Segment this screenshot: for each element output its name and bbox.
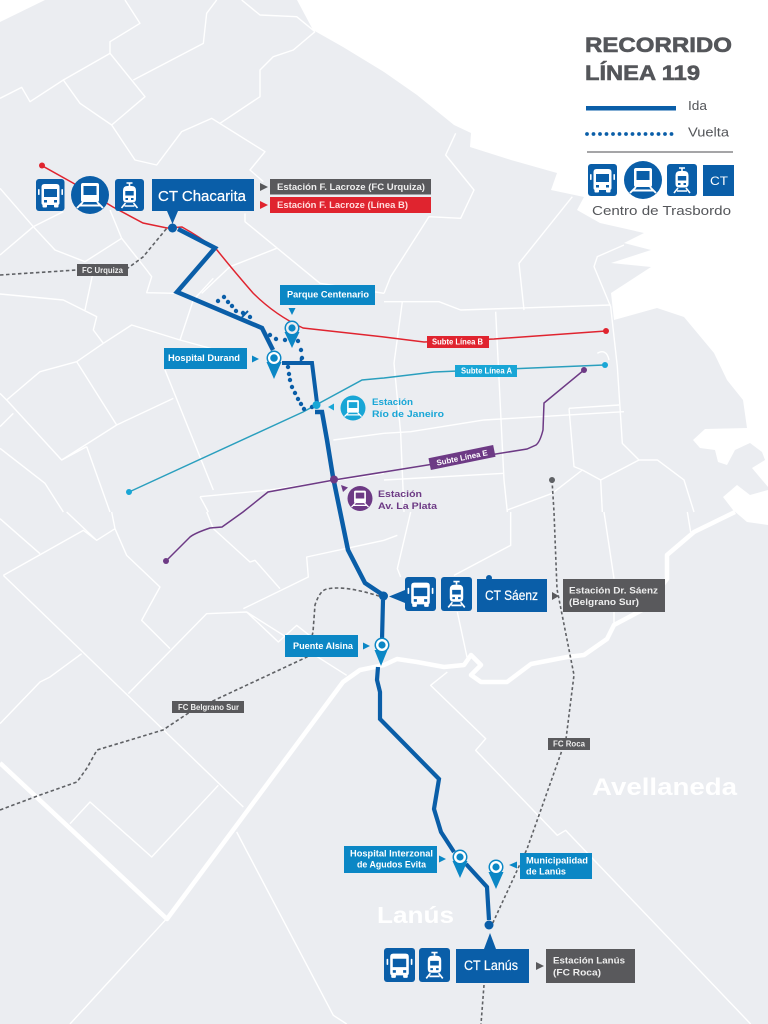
transfer centre: Chacarita [36, 176, 431, 224]
tag: Estación Dr. Sáenz (Belgrano Sur): Estación Dr. Sáenz [569, 586, 659, 596]
box: CT Lanús [456, 933, 529, 983]
callout: Municipalidad de Lanús: Municipalidad [526, 856, 588, 866]
label: FC Roca: FC Roca [553, 740, 586, 748]
text: Lanús: Lanús [377, 902, 454, 928]
riachuelo and thick avenue [0, 512, 735, 919]
legend icon: CT: CT [710, 174, 729, 188]
box: CT Chacarita: CT Chacarita [158, 189, 247, 205]
station: Río de Janeiro: Estación [372, 397, 413, 408]
subway line E [163, 367, 587, 564]
subway line A [126, 362, 608, 495]
title: RECORRIDO [585, 34, 732, 57]
station: Río de Janeiro [328, 396, 444, 420]
tag: Estación Lanús (FC Roca): Estación Lanús [553, 956, 625, 966]
node: Río de Janeiro [312, 401, 320, 409]
legend: ida [586, 99, 707, 113]
callout: Hospital Interzonal de Agudos Evita [344, 846, 446, 873]
streets north-west [0, 0, 384, 512]
legend icon: bus [588, 164, 617, 196]
legend: ida: Ida [688, 99, 707, 113]
callout: Municipalidad de Lanús [509, 853, 592, 879]
icon: train [115, 179, 144, 211]
label: Subte Línea E [428, 445, 496, 470]
tag: Estación F. Lacroze (Línea B) [260, 197, 431, 213]
box: CT Chacarita [152, 179, 254, 224]
transfer centre: Sáenz [389, 575, 665, 612]
tag: Estación F. Lacroze (Línea B): Estación F. Lacroze (Línea B) [277, 200, 408, 210]
label: FC Belgrano Sur: FC Belgrano Sur [178, 703, 239, 712]
route: ida solid [177, 229, 489, 920]
tag: Estación Dr. Sáenz (Belgrano Sur) [552, 579, 665, 612]
box: CT Lanús: CT Lanús [464, 958, 518, 973]
label: Subte Línea B: Subte Línea B [432, 338, 483, 346]
streets north-east [384, 133, 694, 512]
icon: bus [389, 577, 436, 611]
callout: Hospital Durand [164, 348, 259, 369]
callout: Municipalidad de Lanús: de Lanús [526, 866, 566, 876]
station: Av. La Plata: Estación [378, 489, 422, 500]
river mouth [723, 485, 768, 525]
tag: Estación Lanús (FC Roca): (FC Roca) [553, 968, 601, 978]
node: Av. La Plata [330, 476, 338, 484]
legend: vuelta: Vuelta [688, 126, 729, 140]
callout: Hospital Durand: Hospital Durand [168, 353, 240, 364]
box: CT Sáenz [477, 579, 547, 612]
rail line: FC Urquiza [0, 228, 167, 275]
rail line: FC Roca [481, 477, 574, 1024]
icon: bus [384, 948, 415, 982]
label: Subte Línea A: Subte Línea A [461, 366, 512, 376]
icon: subway [71, 176, 109, 214]
title [585, 34, 732, 85]
label: FC Urquiza [77, 264, 128, 276]
callout: Puente Alsina [285, 635, 370, 657]
box: CT Sáenz: CT Sáenz [485, 588, 538, 603]
rail line: FC Belgrano Sur [0, 588, 382, 810]
title: LÍNEA 119 [585, 62, 700, 85]
pin: Municipalidad de Lanús [488, 860, 504, 889]
callout: Puente Alsina: Puente Alsina [293, 641, 354, 652]
station: Río de Janeiro: Río de Janeiro [372, 409, 444, 420]
pin: Parque Centenario [284, 320, 300, 348]
callout: Hospital Interzonal de Agudos Evita: de Agudos Evita [357, 860, 427, 870]
station: Av. La Plata [341, 485, 438, 512]
node: Sáenz [379, 592, 388, 600]
callout: Parque Centenario [280, 285, 375, 315]
icon: train [419, 948, 450, 982]
callout: Parque Centenario: Parque Centenario [287, 290, 369, 300]
tag: Estación F. Lacroze (FC Urquiza) [260, 179, 431, 194]
legend icon: train [667, 164, 697, 196]
subway line B [39, 162, 609, 342]
tag: Estación F. Lacroze (FC Urquiza): Estación F. Lacroze (FC Urquiza) [277, 182, 425, 192]
callout: Hospital Interzonal de Agudos Evita: Hospital Interzonal [350, 848, 433, 858]
route: vuelta dotted [216, 295, 314, 411]
label: FC Urquiza: FC Urquiza [82, 266, 124, 275]
legend caption: Centro de Trasbordo [592, 203, 731, 218]
pin: Hospital Durand [266, 350, 282, 379]
legend icon: subway [624, 161, 662, 199]
transfer centre: Lanús [384, 933, 635, 983]
label: FC Belgrano Sur [172, 701, 244, 713]
label: FC Roca [548, 738, 590, 750]
streets south [0, 512, 384, 1024]
pin: Hospital Interzonal [452, 850, 468, 878]
legend icon: CT [703, 165, 734, 196]
label: Subte Línea E: Subte Línea E [436, 448, 489, 468]
pin: Puente Alsina [374, 638, 390, 666]
icon: train [441, 577, 472, 611]
legend [586, 99, 734, 218]
text: Avellaneda: Avellaneda [592, 774, 738, 801]
node: Lanús [484, 920, 494, 930]
tag: Estación Lanús (FC Roca) [536, 949, 635, 983]
tag: Estación Dr. Sáenz (Belgrano Sur): (Belgrano Sur) [569, 597, 639, 607]
station: Av. La Plata: Av. La Plata [378, 501, 438, 512]
icon: bus [36, 179, 64, 211]
node: Chacarita [168, 224, 177, 232]
label: Subte Línea B [427, 336, 489, 348]
label: Subte Línea A [455, 365, 517, 377]
